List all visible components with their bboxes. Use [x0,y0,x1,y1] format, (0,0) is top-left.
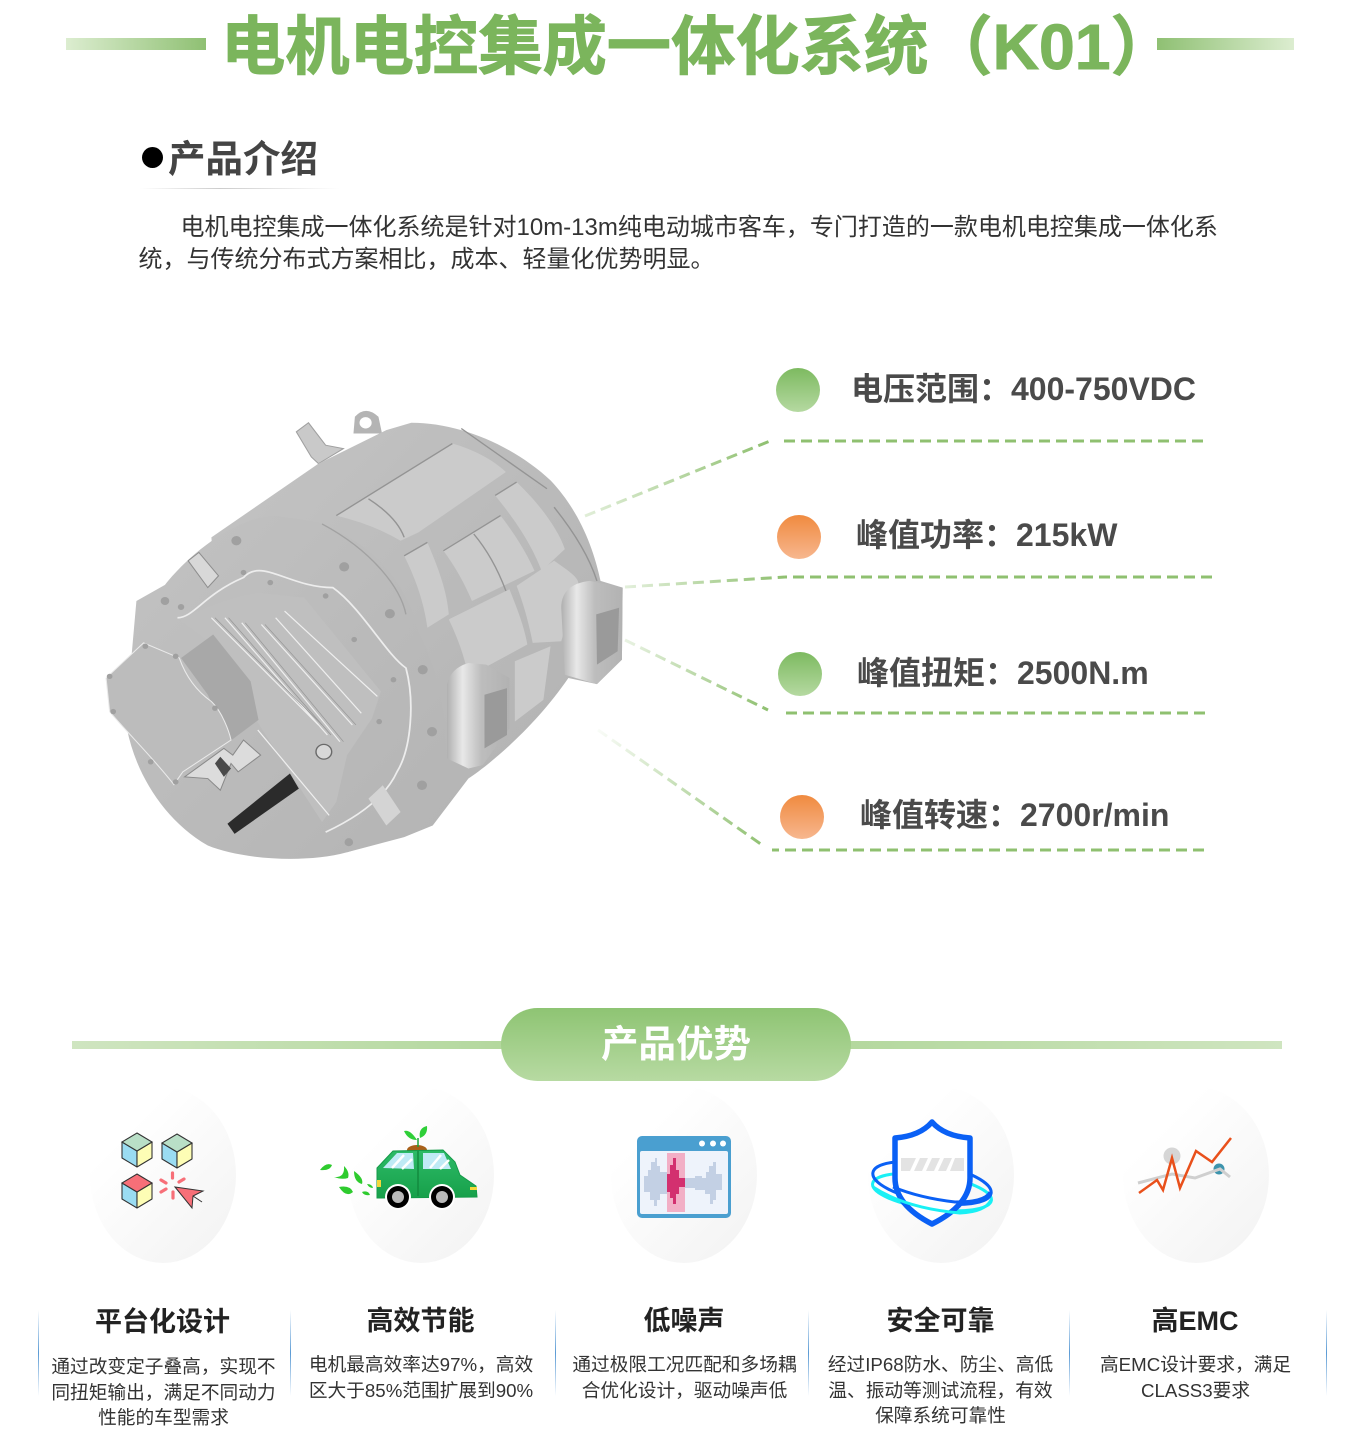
feature description: 合优化设计，驱动噪声低 [582,1380,787,1400]
feature description: 通过极限工况匹配和多场耦 [572,1354,797,1375]
fin lines [211,611,377,815]
hose fitting [296,423,343,464]
icon: platform cubes [121,1132,204,1210]
shell panels [336,444,578,722]
title right bar [1157,38,1294,50]
motor illustration [106,410,623,859]
bracket front port [484,688,507,748]
intro paragraph [138,214,1218,273]
feature title: 平台化设计 [95,1307,230,1337]
lifting eye [353,411,382,434]
feature description [51,1356,276,1428]
feature description: 区大于85%范围扩展到90% [309,1380,533,1400]
title text: 电机电控集成一体化系统（K01） [221,11,1175,83]
spec: peak power: 峰值功率：215kW [856,517,1117,553]
top connector [188,552,219,588]
spec marker: voltage [776,368,820,412]
feature title: 高效节能 [366,1306,474,1336]
feature: low noise [572,1306,797,1400]
divider left line [72,1041,502,1049]
feature: platform design [51,1307,276,1428]
feature description: 性能的车型需求 [98,1407,229,1428]
inverter cover [106,643,231,785]
mounting bracket front [447,663,509,768]
shell rib lines [336,428,597,591]
feature description [1100,1354,1291,1400]
feature description [828,1354,1053,1426]
icon: EMC signal chart [1138,1137,1232,1194]
heading bullet [142,147,163,168]
feature: safety reliability [828,1306,1053,1426]
feature title: 安全可靠 [886,1306,994,1336]
divider right line [850,1041,1282,1049]
feature title: 高EMC [1152,1306,1238,1336]
feature description: 同扭矩输出，满足不同动力 [51,1382,276,1402]
icon: green car [320,1126,478,1208]
black bar [227,774,299,834]
spec marker: speed [780,795,824,839]
title left bar [66,38,206,50]
advantages pill heading [501,1008,851,1081]
feature title: 低噪声 [644,1306,724,1336]
callout lines [584,440,1212,852]
heading underline [140,188,340,189]
icon: noise waveform window [637,1136,731,1218]
callout line: speed [598,730,1204,850]
front flange [126,516,446,859]
heading text: 产品介绍 [168,138,318,180]
feature description: 通过改变定子叠高，实现不 [51,1356,276,1377]
section heading: product intro [142,138,320,189]
feature description: 电机最高效率达97%，高效 [309,1354,533,1375]
bracket rear port [596,608,619,665]
callout line: voltage [585,441,1203,516]
feature description: CLASS3要求 [1141,1380,1250,1400]
icon: shield with orbit rings [871,1119,993,1227]
connectors [185,740,261,790]
advantages pill heading: 产品优势 [601,1023,751,1065]
sight glass [316,744,332,759]
feature description: 温、振动等测试流程，有效 [828,1380,1053,1400]
feature description [309,1354,533,1400]
housing shell [211,423,623,852]
feature description [572,1354,797,1400]
feature: high efficiency [309,1306,533,1400]
spec marker: torque [778,652,822,696]
spec: peak torque: 峰值扭矩：2500N.m [857,655,1149,691]
cover recess [181,634,259,742]
callout line: power [625,577,1212,587]
spec: peak speed: 峰值转速：2700r/min [860,797,1169,833]
advantages divider [72,1008,1282,1081]
feature description: 经过IP68防水、防尘、高低 [828,1354,1053,1375]
mounting bracket rear [561,581,623,684]
fin block [179,593,381,822]
bolts [107,536,437,846]
feature description: 保障系统可靠性 [875,1405,1006,1426]
callout line: torque [625,640,1205,713]
intro paragraph: 统，与传统分布式方案相比，成本、轻量化优势明显。 [138,246,714,273]
flange edge highlight [177,571,411,832]
spec: voltage range: 电压范围：400-750VDC [851,371,1196,407]
feature: high EMC [1100,1306,1291,1400]
intro paragraph: 电机电控集成一体化系统是针对10m-13m纯电动城市客车，专门打造的一款电机电控集成一体化系 [180,214,1218,241]
title banner [66,11,1294,83]
cylinder [368,785,401,825]
spec marker: power [777,515,821,559]
feature description: 高EMC设计要求，满足 [1100,1354,1291,1375]
